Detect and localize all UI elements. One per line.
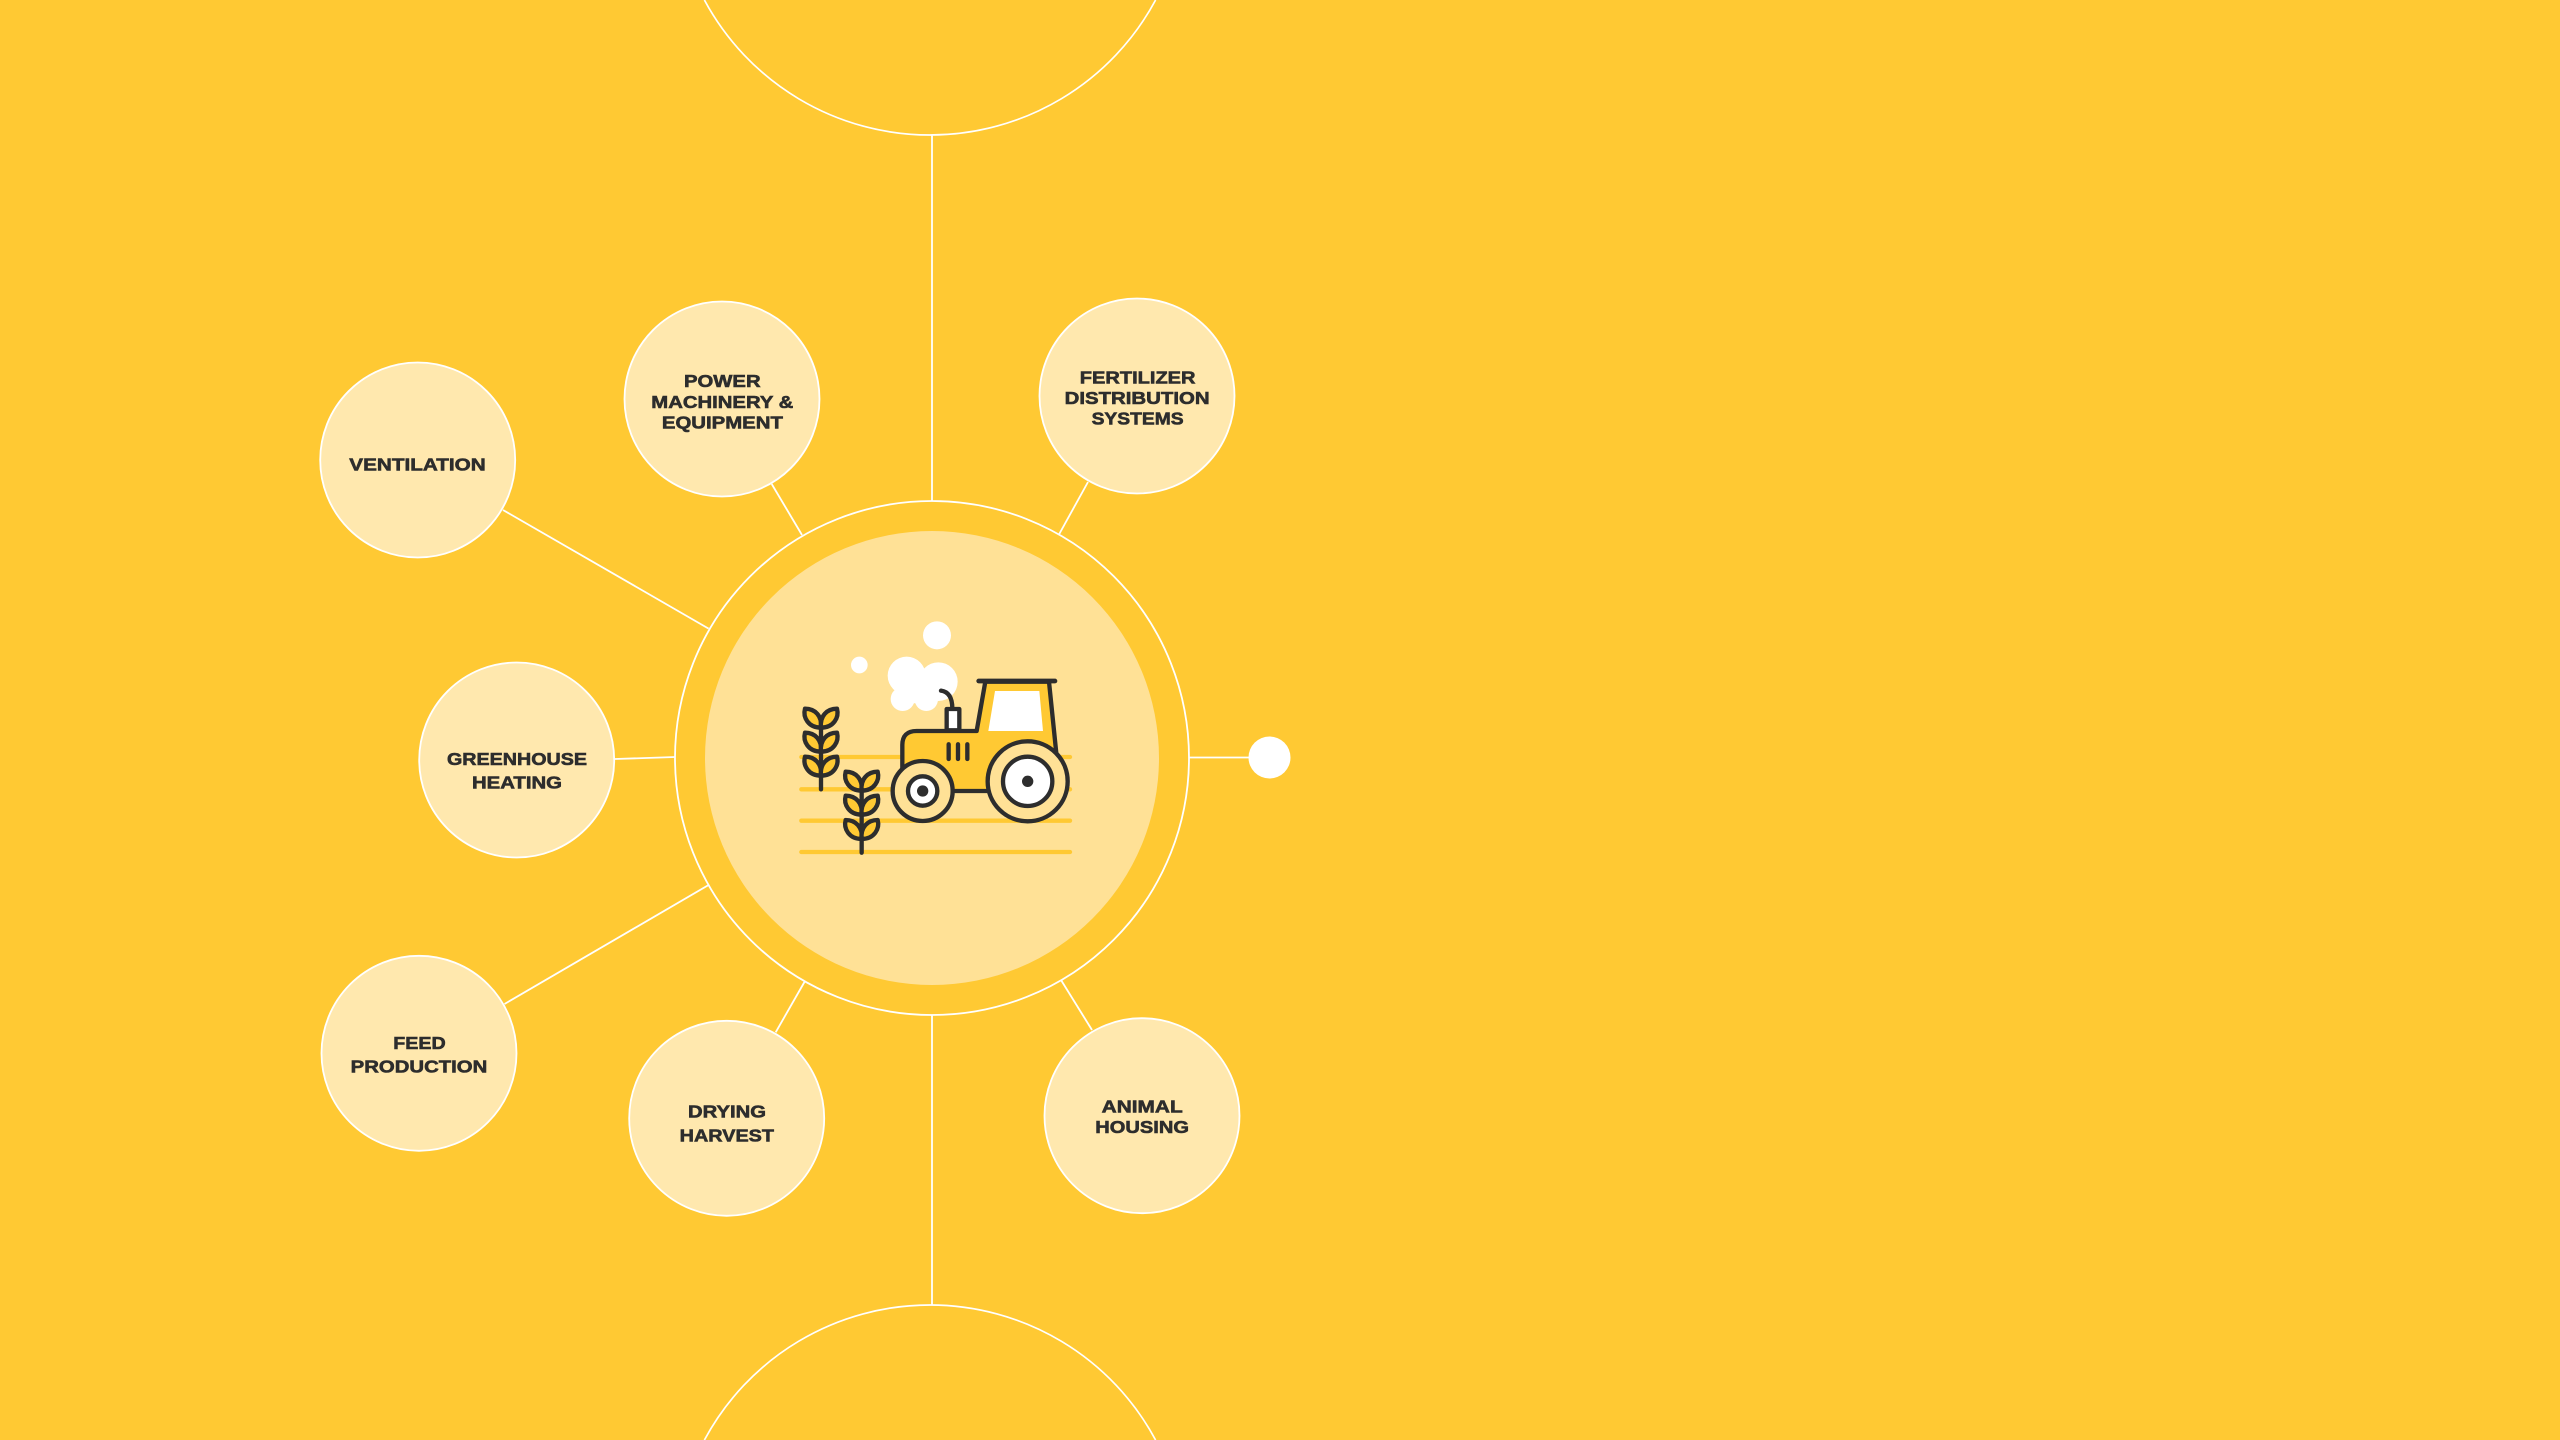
- node: power machinery and equipment: EQUIPMENT: [662, 413, 783, 433]
- rear wheel: [988, 741, 1068, 821]
- connector lines: [503, 135, 1250, 1305]
- node: drying harvest: HARVEST: [680, 1126, 774, 1146]
- node: power machinery and equipment: POWER: [684, 371, 761, 391]
- node: animal housing: [1044, 1018, 1240, 1213]
- field lines: [801, 757, 1070, 852]
- node: power machinery and equipment: MACHINERY &: [651, 392, 794, 412]
- node: feed production: PRODUCTION: [351, 1057, 487, 1077]
- node: power machinery and equipment: [624, 302, 820, 496]
- node: greenhouse heating: HEATING: [472, 773, 562, 793]
- tractor body and cab: [902, 681, 1057, 791]
- node dot: [1248, 736, 1290, 778]
- node: fertilizer distribution systems: DISTRIBUTION: [1065, 388, 1210, 408]
- node: animal housing: ANIMAL: [1102, 1096, 1183, 1116]
- node: drying harvest: [629, 1021, 824, 1216]
- central ring: [675, 501, 1189, 1015]
- node: greenhouse heating: GREENHOUSE: [447, 749, 587, 769]
- node: feed production: [322, 956, 516, 1151]
- icon: tractor in field: [801, 621, 1070, 853]
- wheat plant right: [845, 772, 878, 853]
- node: fertilizer distribution systems: SYSTEMS: [1092, 409, 1184, 429]
- node: greenhouse heating: [419, 662, 614, 858]
- node: drying harvest: DRYING: [688, 1102, 766, 1122]
- node: fertilizer distribution systems: [1040, 298, 1234, 494]
- node: ventilation: VENTILATION: [349, 455, 486, 475]
- front wheel: [893, 761, 953, 821]
- node: ventilation: [320, 362, 515, 558]
- smoke puffs: [851, 621, 958, 711]
- node: feed production: FEED: [393, 1033, 446, 1053]
- top partial circle: [704, 0, 1156, 135]
- wheat plant left: [804, 709, 838, 789]
- central disc: [705, 531, 1159, 985]
- bottom partial circle: [704, 1305, 1156, 1440]
- exhaust pipe: [941, 691, 959, 730]
- node: animal housing: HOUSING: [1095, 1117, 1189, 1137]
- node: fertilizer distribution systems: FERTILIZER: [1080, 367, 1196, 387]
